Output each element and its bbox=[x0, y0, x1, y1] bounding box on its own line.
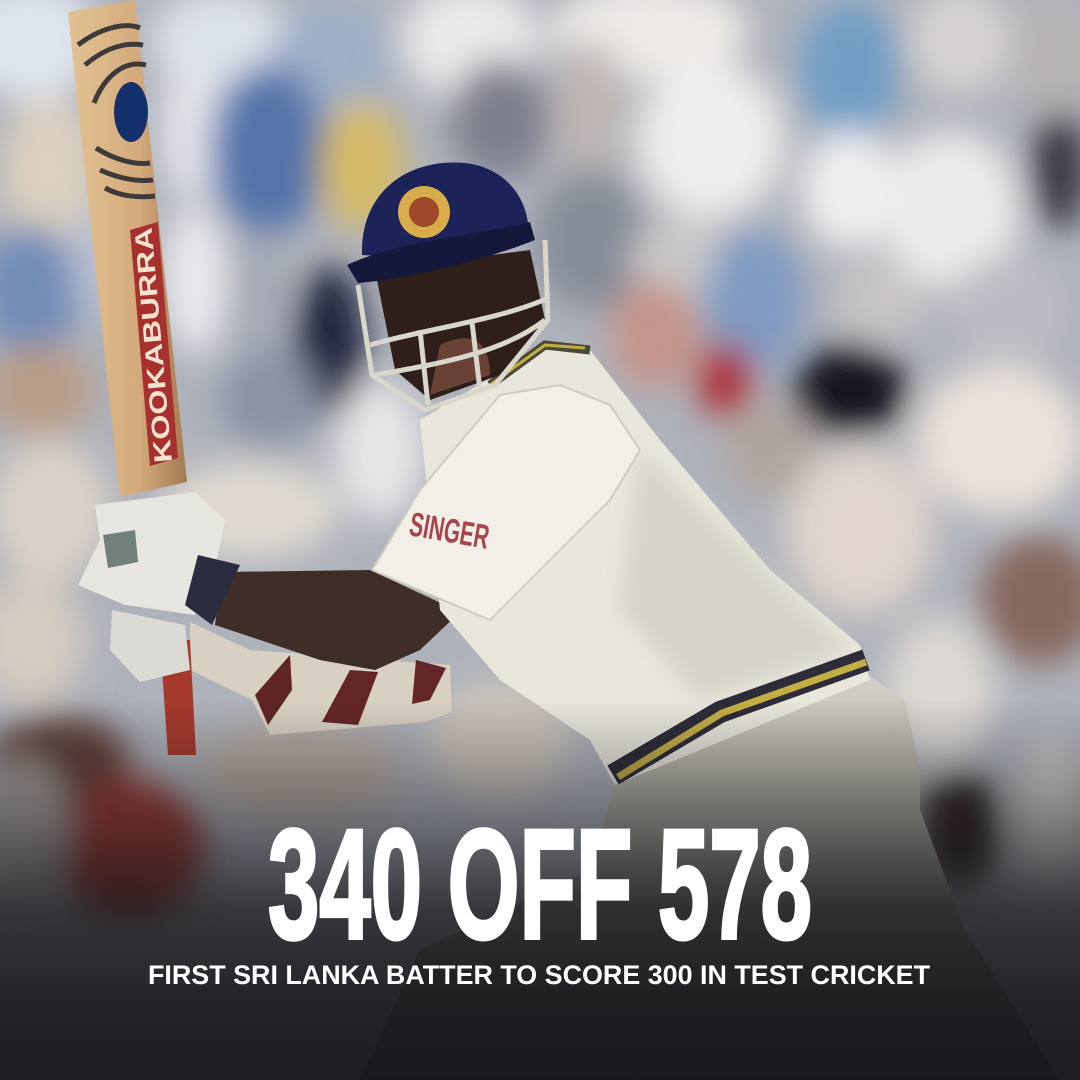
glove patch bbox=[103, 530, 138, 568]
bat handle bbox=[160, 640, 196, 755]
helmet bbox=[362, 162, 528, 256]
trousers bbox=[360, 675, 1060, 1080]
face bbox=[375, 250, 545, 400]
bat blue circle bbox=[114, 82, 148, 142]
shirt shading bbox=[620, 450, 850, 700]
bat brand text: KOOKABURRA bbox=[130, 226, 178, 464]
lower glove bbox=[110, 610, 190, 682]
wristband bbox=[185, 555, 240, 625]
far arm with elbow guard bbox=[190, 622, 452, 735]
helmet brim bbox=[347, 222, 535, 283]
sponsor text on sleeve: SINGER bbox=[407, 505, 492, 557]
subheading: FIRST SRI LANKA BATTER TO SCORE 300 IN TEST CRICKET bbox=[148, 960, 931, 990]
collar stripes bbox=[490, 345, 590, 385]
helmet badge bbox=[398, 186, 450, 238]
helmet grille bbox=[358, 240, 548, 410]
upper glove bbox=[78, 492, 225, 615]
cricket bat bbox=[68, 0, 187, 497]
near arm bbox=[215, 570, 460, 670]
bottom dark gradient bbox=[0, 700, 1080, 1080]
sleeve bbox=[372, 385, 640, 620]
shirt body bbox=[420, 345, 870, 785]
bat top logo bbox=[78, 26, 155, 197]
bat brand panel bbox=[130, 222, 178, 466]
waistband stripes bbox=[613, 660, 866, 777]
